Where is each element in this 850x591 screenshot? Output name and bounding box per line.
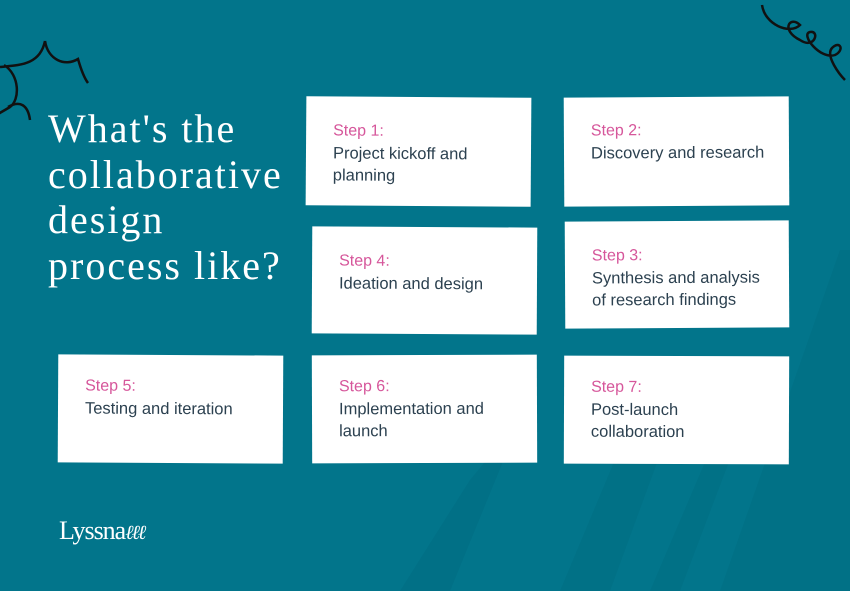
card: step 7: Post-launch [591,401,678,419]
card: step 4: Step 4: [339,253,390,270]
card: step 2: Step 2: [591,122,642,139]
card: step 6: Implementation and [339,400,484,418]
card: step 5 [58,354,283,464]
card: step 7: Step 7: [591,379,642,396]
card: step 6: launch [339,422,388,440]
card: step 5: Testing and iteration [85,400,233,418]
card: step 4: Ideation and design [339,275,483,293]
card: step 5: Step 5: [85,378,136,395]
logo: Lyssnaℓℓℓ [59,516,144,545]
title [48,106,283,288]
title: collaborative [48,152,283,196]
card: step 1: planning [333,166,395,185]
card: step 1: Step 1: [333,122,384,140]
card: step 7: collaboration [591,423,685,441]
card: step 3: Synthesis and analysis [592,269,760,287]
card: step 4 [312,226,537,335]
card: step 7 [564,356,789,464]
card: step 1 [306,96,531,207]
card: step 3: Step 3: [592,247,643,264]
card: step 2: Discovery and research [591,144,764,162]
doodle: top-left scribble [0,40,89,120]
title: design [48,197,164,242]
card: step 6 [312,355,537,463]
title: process like? [48,242,282,288]
card: step 1: Project kickoff and [333,144,468,163]
card: step 6: Step 6: [339,378,390,395]
doodle: top-right loops [760,4,846,81]
title: What's the [48,106,236,151]
card: step 3: of research findings [592,291,736,309]
card: step 3 [565,220,789,329]
card: step 2 [564,96,789,207]
